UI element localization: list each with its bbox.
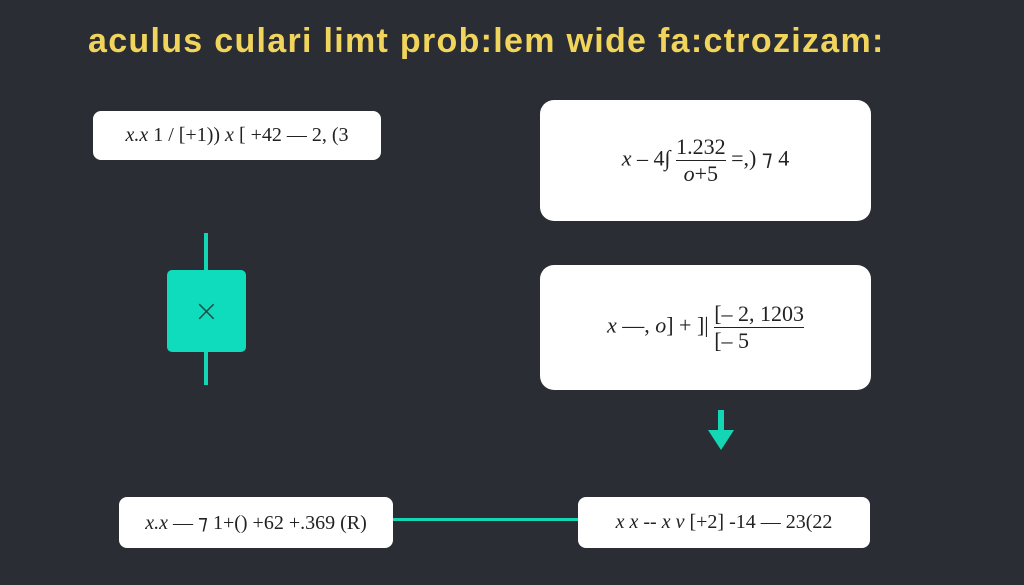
box: bottom-left equation: x.x — ⁊ 1+() +62 +.369 (R) bbox=[145, 512, 367, 534]
box: bottom-left equation bbox=[119, 497, 393, 548]
box: bottom-right equation bbox=[578, 497, 870, 548]
box: bracket equation: [– 2, 1203 bbox=[714, 301, 804, 326]
box: integral equation: 1.232 bbox=[676, 134, 726, 159]
box: integral equation: o+5 bbox=[684, 161, 718, 186]
box: integral equation: x – 4∫ =,) ⁊ 4 bbox=[622, 146, 789, 171]
title: aculus culari limt prob:lem wide fa:ctrozizam: bbox=[88, 22, 885, 60]
box: bracket equation bbox=[540, 265, 871, 390]
box: top-left equation: x.x 1 / [+1)) x [ +42 –– 2, (3 bbox=[125, 124, 349, 146]
box: bottom-right equation: x x -- x v [+2] -14 — 23(22 bbox=[616, 511, 832, 533]
icon: teal multiply square: × bbox=[194, 294, 219, 328]
box: bracket equation: [– 5 bbox=[714, 328, 749, 353]
box: integral equation bbox=[540, 100, 871, 221]
connector: horizontal line bbox=[393, 518, 578, 521]
connector: vertical line top bbox=[204, 233, 208, 270]
connector: vertical line bottom bbox=[204, 352, 208, 385]
box: top-left equation bbox=[93, 111, 381, 160]
icon: teal multiply square bbox=[167, 270, 246, 352]
arrow: down bbox=[708, 410, 734, 450]
box: bracket equation: x —, o] + ]| bbox=[607, 313, 709, 338]
